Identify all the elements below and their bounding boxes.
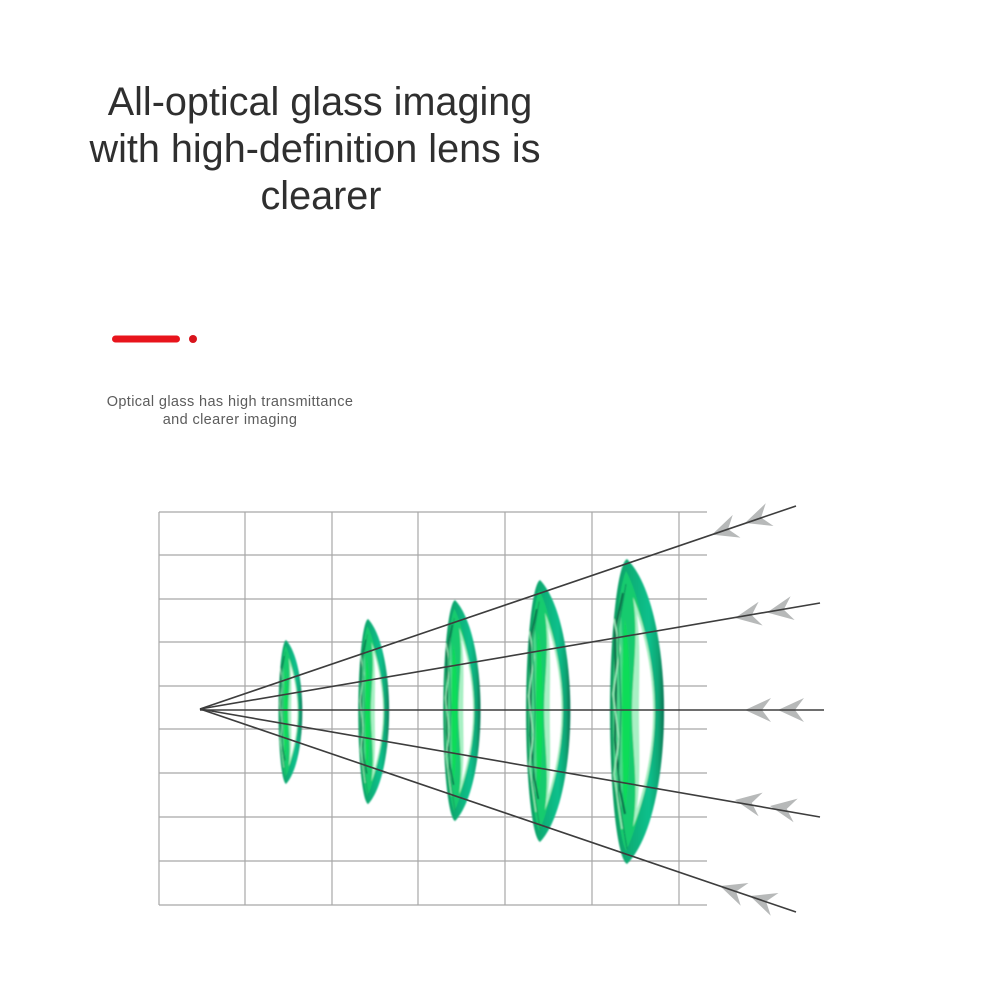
title (90, 80, 540, 218)
title: with high-definition lens is (90, 127, 540, 171)
title: clearer (260, 174, 381, 218)
lens 2 (358, 619, 389, 804)
subtitle text: Optical glass has high transmittance (107, 394, 353, 410)
lens 3 (443, 600, 481, 821)
title: All-optical glass imaging (108, 80, 532, 124)
red accent bar and dot (112, 335, 197, 343)
lens 1 (279, 640, 302, 784)
arrow heads (708, 503, 804, 916)
subtitle text (107, 394, 353, 428)
lens 5 (610, 559, 664, 864)
light rays (200, 506, 824, 912)
subtitle text: and clearer imaging (163, 412, 297, 428)
grid (159, 512, 707, 905)
lens 4 (526, 580, 570, 842)
